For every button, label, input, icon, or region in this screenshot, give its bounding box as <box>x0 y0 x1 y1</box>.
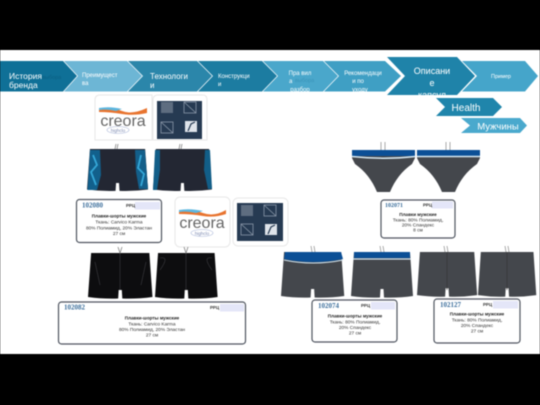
chevron: Рекомендации по уходу: Рекомендаци <box>344 71 382 77</box>
chevron: История бренда <box>0 61 77 92</box>
card: 102080: Плавки-шорты мужские <box>92 214 147 218</box>
card: 102071 <box>381 200 455 238</box>
logo: creora highclo middle <box>175 197 230 247</box>
card: 102071: 102071 <box>385 203 403 209</box>
chevron: Описание капсул: капсул <box>418 90 446 100</box>
card: 102071: Ткань: 80% Полиамид, <box>393 218 443 224</box>
logo: creora highclo top: highclo <box>111 128 126 133</box>
tag: Health <box>436 98 502 116</box>
card: 102071: РРЦ <box>423 202 433 208</box>
card: 102082 <box>58 302 246 344</box>
chevron: Правила выбора: выбора <box>295 78 315 84</box>
chevron: Рекомендации по уходу: уходу <box>352 88 368 94</box>
product: briefs 102071 back <box>417 142 480 192</box>
chevron: Технологии <box>128 61 212 92</box>
card: 102082: Ткань: Carvico Karma <box>128 322 176 328</box>
card: 102071: 20% Спандекс <box>402 222 435 228</box>
chevron: Пример <box>462 61 538 92</box>
card: 102127: РРЦ <box>483 302 493 307</box>
chevron: История бренда: бренда <box>9 80 38 90</box>
product: briefs 102071 front <box>352 142 415 192</box>
chevron: Преимущества <box>64 61 142 92</box>
card: 102127: 20% Спандекс <box>461 323 494 329</box>
card: 102074: Ткань: 80% Полиамид, <box>330 320 380 326</box>
chevron: Правила выбора: разбор <box>290 88 310 94</box>
chevron: Правила выбора <box>263 61 338 94</box>
product: shorts 102082 back <box>155 247 218 299</box>
card: 102074: 20% Спандекс <box>339 325 372 331</box>
chevron: Рекомендации по уходу <box>324 61 401 94</box>
product: shorts 102127 front <box>417 246 477 297</box>
card: 102127: Плавки-шорты мужские <box>450 312 505 316</box>
card: 102071: 8 см <box>413 228 423 234</box>
card: 102082: 80% Полиамид, 20% Эластан <box>119 327 185 333</box>
card: 102127 <box>434 299 520 343</box>
chevron: Описание капсул: е <box>429 78 435 88</box>
card: 102080: 102080 <box>82 202 104 210</box>
chevron: Преимущества: ва <box>82 81 89 87</box>
chevron: Конструкции: Конструкци <box>218 74 250 80</box>
product: shorts 102074 front <box>281 246 344 298</box>
card: 102074 <box>312 300 397 342</box>
card: 102082: 27 см <box>146 332 158 338</box>
tag: Мужчины: Мужчины <box>477 122 519 132</box>
card: 102080 <box>76 200 162 242</box>
icon panel: fabric properties top <box>153 95 207 140</box>
card: 102074: РРЦ <box>361 303 371 308</box>
chevron: Преимущества: Преимущест <box>82 73 118 79</box>
tag: Health: Health <box>452 103 480 114</box>
logo: creora highclo middle: creora <box>179 215 225 232</box>
icon panel: fabric properties middle <box>233 198 288 246</box>
chevron: Пример: Пример <box>491 74 511 80</box>
card: 102071: Плавки мужские <box>399 212 437 217</box>
card: 102080: 80% Полиамид, 20% Эластан <box>86 226 152 232</box>
logo: creora highclo middle: highclo <box>195 231 210 236</box>
card: 102080: Ткань: Carvico Karma <box>95 220 143 226</box>
chevron: История бренда: История <box>9 71 42 81</box>
product: shorts 102080 back <box>153 144 212 191</box>
card: 102127: 27 см <box>471 328 483 334</box>
card: 102127: Ткань: 80% Полиамид, <box>452 318 502 324</box>
chevron: Конструкции <box>198 61 277 92</box>
navigation chevrons <box>0 57 538 100</box>
card: 102127: 102127 <box>440 301 462 309</box>
product: shorts 102127 back <box>478 246 536 297</box>
card: 102082: 102082 <box>64 304 86 312</box>
slide background <box>0 50 540 354</box>
chevron: Рекомендации по уходу: и по <box>352 79 364 85</box>
product: shorts 102074 back <box>351 246 413 298</box>
chevron: Правила выбора: а <box>289 79 293 85</box>
chevron: Конструкции: и <box>218 82 221 88</box>
chevron: Технологии: и <box>150 81 154 90</box>
card: 102082: РРЦ <box>210 305 220 310</box>
card: 102080: РРЦ <box>126 203 136 208</box>
chevron: Описание капсул: Описани <box>414 66 450 76</box>
chevron: Описание капсул <box>387 57 475 100</box>
chevron: Технологии: Технологи <box>150 72 188 81</box>
chevron: Правила выбора: Пра вил <box>289 71 312 77</box>
card: 102080: 27 см <box>113 231 125 237</box>
card: 102074: 102074 <box>318 302 340 310</box>
card: 102082: Плавки-шорты мужские <box>125 316 180 320</box>
chevron: История бренда: выбора <box>42 75 62 81</box>
logo: creora highclo top <box>95 95 152 140</box>
product: shorts 102080 front <box>87 144 148 191</box>
product: shorts 102082 front <box>88 247 152 299</box>
card: 102074: Плавки-шорты мужские <box>328 314 383 318</box>
tag: Мужчины <box>461 118 527 133</box>
card: 102074: 27 см <box>349 330 361 336</box>
logo: creora highclo top: creora <box>100 113 146 130</box>
